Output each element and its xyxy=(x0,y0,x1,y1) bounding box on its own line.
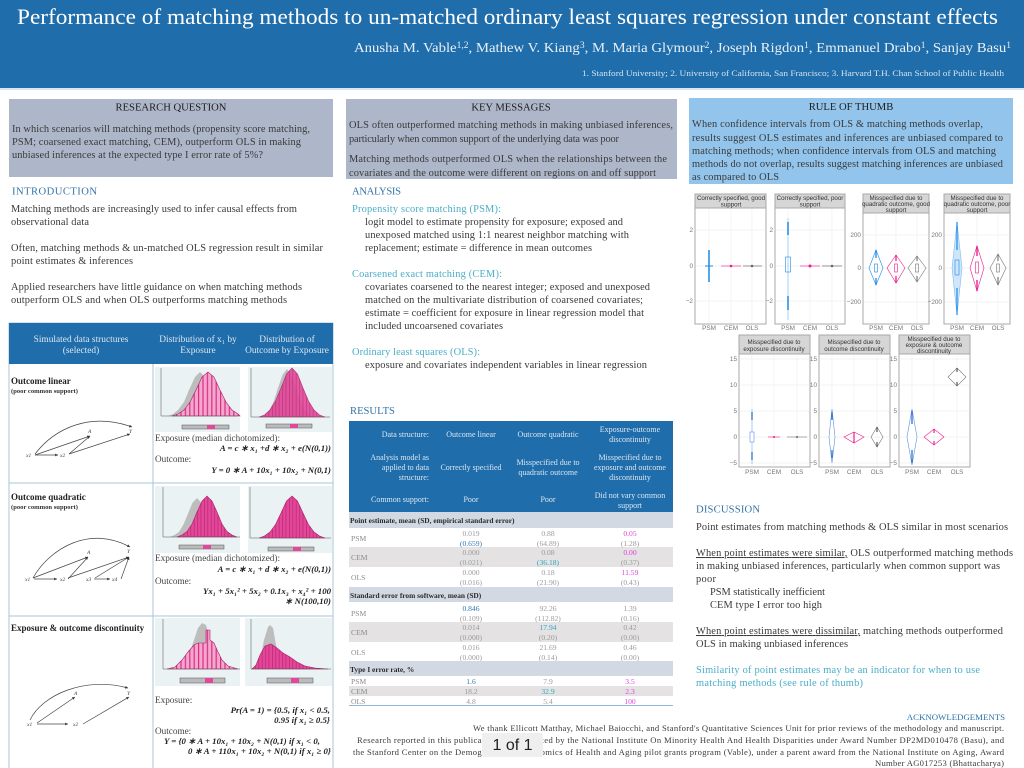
chart: correctly specified, poor support xyxy=(766,194,845,332)
results: standard error: OLS xyxy=(351,648,365,657)
results table header: applied to data xyxy=(382,463,429,472)
results: standard error: 92.26 xyxy=(539,604,557,613)
equations: outcome linear: Y = 0 ∗ A + 10x₁ + 10x₂ + N(0,1) xyxy=(211,465,331,475)
results table header: Exposure-outcome xyxy=(600,425,661,434)
authors: , Sanjay Basu xyxy=(926,41,1006,56)
results: point estimate: (0.659) xyxy=(460,539,483,548)
histogram: x1 by exposure xyxy=(155,367,240,432)
equations: outcome quadratic: Yx₁ + 5x₁² + 5x₂ + 0.1x₃ + x₄² + 100 xyxy=(203,586,332,596)
table header: Distribution of xyxy=(259,334,316,345)
chart: misspecified quadratic, poor support: CEM xyxy=(970,325,984,332)
results table header: structure: xyxy=(399,473,429,482)
panel: key messages xyxy=(346,99,677,179)
chart: misspecified quadratic, poor support xyxy=(928,194,1010,332)
equations: discontinuity: Outcome: xyxy=(155,726,191,736)
chart: misspecified quadratic, poor support: support xyxy=(967,207,988,214)
results: point estimate: 0.000 xyxy=(462,548,480,557)
results: point estimate: (0.37) xyxy=(621,558,640,567)
results: standard error: 0.846 xyxy=(462,604,480,613)
DAG: outcome quadratic: x4 xyxy=(111,576,117,583)
equations: outcome quadratic: ∗ N(100,10) xyxy=(285,596,331,606)
results: point estimate: (36.18) xyxy=(537,558,560,567)
authors: 1 xyxy=(921,40,926,50)
analysis section xyxy=(352,186,651,371)
chart: outcome discontinuity: 0 xyxy=(813,434,817,441)
DAG: outcome quadratic xyxy=(24,538,131,583)
panel: rule of thumb xyxy=(689,98,1013,184)
authors: 1,2 xyxy=(457,40,468,50)
title: Performance of matching methods to un-matched ordinary least squares regression under constant effects xyxy=(17,4,998,29)
chart: exposure and outcome discontinuity: −5 xyxy=(890,460,897,467)
results table header xyxy=(349,421,673,512)
results table header: Outcome linear xyxy=(446,430,496,439)
results: standard error: Standard error from software, mean (SD) xyxy=(350,591,482,600)
DAG: discontinuity: A xyxy=(73,691,78,697)
rule of thumb text: methods do not overlap, results suggest matching inferences are unbiased xyxy=(692,159,1004,170)
results: standard error: (112.82) xyxy=(535,614,561,623)
equations: outcome quadratic: A = c ∗ x₁ + d ∗ x₂ + e(N(0,1)) xyxy=(217,564,331,574)
equations: outcome quadratic: Exposure (median dichotomized): xyxy=(155,553,280,563)
results: standard error: 1.39 xyxy=(623,604,637,613)
chart: exposure and outcome discontinuity: Misspecified due to xyxy=(908,336,961,343)
CEM text: included uncoarsened covariates xyxy=(365,321,503,332)
results: point estimate: PSM xyxy=(351,534,366,543)
DAG: outcome linear: x2 xyxy=(59,453,65,459)
chart: outcome discontinuity: 15 xyxy=(810,356,817,363)
CEM text: matched on the multivariate distribution of coarsened covariates; xyxy=(365,295,643,306)
DAG: discontinuity: x2 xyxy=(72,722,78,728)
discussion text: When point estimates were similar, OLS outperformed matching methods xyxy=(696,548,1013,559)
authors: 2 xyxy=(705,40,709,50)
heading: discussion: DISCUSSION xyxy=(696,504,760,516)
authors: Anusha M. Vable xyxy=(354,41,451,56)
chart: correctly specified, good support xyxy=(686,194,766,332)
results: point estimate: Point estimate, mean (SD, empirical standard error) xyxy=(350,516,515,525)
row sublabel: (poor common support) xyxy=(11,388,78,395)
introduction text: Applied researchers have little guidance on when matching methods xyxy=(11,282,302,293)
chart: misspecified quadratic, poor support: quadratic outcome, poor xyxy=(944,201,1010,208)
chart: correctly specified, good support: −2 xyxy=(686,298,693,305)
introduction text: observational data xyxy=(11,217,89,228)
histogram: x1 by exposure xyxy=(155,486,240,553)
histogram: outcome by exposure xyxy=(245,618,332,686)
equations: discontinuity: Y = {0 ∗ A + 10x₁ + 10x₂ + N(0,1) if x₁ < 0, xyxy=(164,736,320,746)
key messages text: covariates and the outcome were different on regions on and off support xyxy=(349,168,656,179)
results table header: Outcome quadratic xyxy=(517,430,579,439)
chart: misspecified quadratic, good support: OLS xyxy=(911,325,923,332)
chart: exposure and outcome discontinuity: 5 xyxy=(893,408,897,415)
DAG: outcome linear: Y xyxy=(129,429,133,435)
DAG: outcome quadratic: x2 xyxy=(59,577,65,583)
results: point estimate: (64.89) xyxy=(537,539,560,548)
results: type I error rate: 4.8 xyxy=(466,697,476,706)
chart: correctly specified, poor support: CEM xyxy=(803,325,817,332)
results: standard error: 0.42 xyxy=(623,623,637,632)
results: point estimate: (0.016) xyxy=(460,578,483,587)
chart: exposure discontinuity: 15 xyxy=(730,356,737,363)
chart: outcome discontinuity: Misspecified due to xyxy=(828,339,881,346)
chart: correctly specified, good support: Correctly specified, good xyxy=(697,195,766,202)
results: type I error rate: CEM xyxy=(351,687,368,696)
introduction section xyxy=(11,186,324,306)
key messages text: Matching methods outperformed OLS when the relationships between the xyxy=(349,154,667,165)
results: standard error: 21.69 xyxy=(539,643,557,652)
chart: exposure and outcome discontinuity: OLS xyxy=(951,469,963,476)
results: type I error rate: 2.3 xyxy=(625,687,635,696)
chart: exposure and outcome discontinuity: 15 xyxy=(890,356,897,363)
row: outcome linear xyxy=(11,367,332,475)
discussion text: in making unbiased inferences, particularly when common support was xyxy=(696,561,1000,572)
introduction text: point estimates & inferences xyxy=(11,256,133,267)
acknowledgements text: We thank Ellicott Matthay, Michael Baiocchi, and Stanford's Quantitative Sciences Unit for prior reviews of the methodology and manuscript. xyxy=(473,723,1004,733)
results section xyxy=(349,406,673,706)
chart: exposure and outcome discontinuity: discontinuity xyxy=(917,348,952,355)
chart: outcome discontinuity: outcome discontinuity xyxy=(824,346,885,353)
histogram: outcome by exposure xyxy=(248,486,332,553)
chart: misspecified quadratic, good support: support xyxy=(886,207,907,214)
results: type I error rate: OLS xyxy=(351,697,365,706)
results: standard error: CEM xyxy=(351,628,368,637)
results: type I error rate: 18.2 xyxy=(464,687,478,696)
chart: correctly specified, poor support: support xyxy=(800,202,821,208)
chart: exposure discontinuity: CEM xyxy=(767,469,781,476)
chart: exposure discontinuity: 5 xyxy=(733,408,737,415)
rule of thumb text: as compared to OLS xyxy=(692,172,779,183)
chart: correctly specified, good support: 0 xyxy=(689,263,693,270)
results: point estimate: 0.88 xyxy=(541,529,555,538)
results table header: support xyxy=(618,501,643,510)
results table header: Common support: xyxy=(371,495,429,504)
results table header: Did not vary common xyxy=(595,491,665,500)
OLS heading: Ordinary least squares (OLS): xyxy=(352,347,480,358)
results: standard error: PSM xyxy=(351,609,366,618)
authors: , M. Maria Glymour xyxy=(585,41,705,56)
chart: exposure and outcome discontinuity: PSM xyxy=(905,469,919,476)
introduction text: Matching methods are increasingly used to infer causal effects from xyxy=(11,204,297,215)
chart: outcome discontinuity: 5 xyxy=(813,408,817,415)
PSM text: logit model to estimate propensity for exposure; exposed and xyxy=(365,217,624,228)
DAG: outcome quadratic: A xyxy=(86,550,91,556)
chart: misspecified quadratic, poor support: PSM xyxy=(950,325,964,332)
chart: exposure discontinuity: 10 xyxy=(730,382,737,389)
research question text: In which scenarios will matching methods (propensity score matching, xyxy=(12,124,310,135)
research question text: unbiased inferences at the expected type I error rate of 5%? xyxy=(12,150,263,161)
header banner xyxy=(0,0,1024,90)
equations: outcome linear: Exposure (median dichotomized): xyxy=(155,433,280,443)
chart: correctly specified, poor support: −2 xyxy=(766,298,773,305)
chart: misspecified quadratic, good support: 0 xyxy=(857,265,861,272)
histogram: outcome by exposure xyxy=(248,367,332,432)
discussion takeaway: matching methods (see rule of thumb) xyxy=(696,678,863,689)
table header xyxy=(9,323,333,364)
panel: research question xyxy=(9,99,333,177)
chart: exposure discontinuity: exposure discontinuity xyxy=(743,346,806,353)
rule of thumb text: matching methods; when confidence intervals from OLS and matching xyxy=(692,146,996,157)
chart: exposure discontinuity: 0 xyxy=(733,434,737,441)
results: type I error rate: PSM xyxy=(351,677,366,686)
chart: exposure discontinuity: −5 xyxy=(730,460,737,467)
DAG: discontinuity: x1 xyxy=(26,722,32,728)
DAG: outcome linear xyxy=(25,421,133,459)
DAG: outcome quadratic: x3 xyxy=(85,577,91,583)
chart: exposure and outcome discontinuity: 0 xyxy=(893,434,897,441)
table header: Distribution of x₁ by xyxy=(159,334,237,345)
results: standard error: 0.46 xyxy=(623,643,637,652)
discussion text: OLS in making unbiased inferences xyxy=(696,639,848,650)
table header: (selected) xyxy=(63,345,99,356)
results: type I error rate: 32.9 xyxy=(541,687,555,696)
chart: correctly specified, good support: OLS xyxy=(746,325,758,332)
PSM text: unexposed matched using 1:1 nearest neighbor matching with xyxy=(365,230,630,241)
affiliations: 1. Stanford University; 2. University of California, San Francisco; 3. Harvard T.H. Chan School of Public Health xyxy=(582,68,1005,78)
CEM text: covariates coarsened to the nearest integer; exposed and unexposed xyxy=(365,282,651,293)
chart: correctly specified, good support: PSM xyxy=(702,325,716,332)
results: type I error rate: 5.4 xyxy=(543,697,553,706)
page counter overlay xyxy=(482,733,543,757)
chart: misspecified quadratic, good support: −200 xyxy=(847,299,861,306)
heading: introduction: INTRODUCTION xyxy=(12,186,97,198)
chart: correctly specified, good support: CEM xyxy=(724,325,738,332)
results: standard error: (0.20) xyxy=(539,633,558,642)
discussion text: Point estimates from matching methods & OLS similar in most scenarios xyxy=(696,522,1008,533)
authors: 1 xyxy=(1006,40,1011,50)
discussion text: When point estimates were dissimilar, matching methods outperformed xyxy=(696,626,1003,637)
results: standard error: (0.109) xyxy=(460,614,483,623)
results: point estimate: (0.43) xyxy=(621,578,640,587)
heading: rule of thumb: RULE OF THUMB xyxy=(809,102,893,113)
chart: correctly specified, poor support: Correctly specified, poor xyxy=(777,195,843,202)
equations: outcome quadratic: Outcome: xyxy=(155,576,191,586)
equations: discontinuity: 0.95 if x₁ ≥ 0.5} xyxy=(274,715,330,725)
results: point estimate: 11.59 xyxy=(622,568,639,577)
equations: discontinuity xyxy=(155,695,331,756)
table header: Simulated data structures xyxy=(34,335,129,345)
discussion text: PSM statistically inefficient xyxy=(710,587,825,598)
chart: outcome discontinuity: CEM xyxy=(847,469,861,476)
discussion takeaway: Similarity of point estimates may be an indicator for when to use xyxy=(696,665,980,676)
acknowledgements text: Number AG017253 (Bhattacharya) xyxy=(875,758,1004,768)
acknowledgements text: the Stanford Center on the Demography and Economics of Health and Aging pilot grants program (Vable), under a parent award from the National Institute on Aging, Award xyxy=(353,747,1005,757)
OLS text: exposure and covariates independent variables in linear regression xyxy=(365,360,648,371)
chart: misspecified quadratic, good support xyxy=(847,194,931,332)
results table header: Poor xyxy=(463,495,479,504)
chart: outcome discontinuity: PSM xyxy=(825,469,839,476)
chart: correctly specified, poor support: OLS xyxy=(826,325,838,332)
DAG: discontinuity: Y xyxy=(127,691,131,697)
results: point estimate: OLS xyxy=(351,573,365,582)
chart: exposure and outcome discontinuity xyxy=(890,335,970,476)
CEM heading: Coarsened exact matching (CEM): xyxy=(352,269,502,280)
heading: results: RESULTS xyxy=(350,406,395,417)
histogram: x1 by exposure xyxy=(155,618,240,686)
authors: , Joseph Rigdon xyxy=(709,41,804,56)
row: outcome quadratic xyxy=(11,486,332,606)
equations: discontinuity: 0 ∗ A + 110x₁ + 10x₂ + N(0,1) if x₁ ≥ 0} xyxy=(188,746,331,756)
chart: misspecified quadratic, good support: PSM xyxy=(869,325,883,332)
results: standard error: (0.00) xyxy=(621,633,640,642)
DAG: discontinuity xyxy=(26,684,131,728)
results: standard error: (0.000) xyxy=(460,633,483,642)
introduction text: outperform OLS and when OLS outperforms matching methods xyxy=(11,295,287,306)
results: point estimate: 0.08 xyxy=(541,548,555,557)
chart: misspecified quadratic, good support: quadratic outcome, good xyxy=(862,201,931,208)
table: simulated data structures xyxy=(9,323,333,768)
research question text: PSM; coarsened exact matching, CEM), outperform OLS in making xyxy=(12,137,301,148)
results table header: Analysis model as xyxy=(370,453,429,462)
results: type I error rate: Type I error rate, % xyxy=(350,665,414,674)
chart: misspecified quadratic, poor support: −200 xyxy=(928,299,942,306)
DAG: outcome quadratic: x1 xyxy=(24,577,30,583)
results: type I error rate: 3.5 xyxy=(625,677,635,686)
chart: outcome discontinuity: OLS xyxy=(871,469,883,476)
key messages text: particularly when common support of the underlying data was poor xyxy=(349,134,620,145)
results: point estimate: 0.18 xyxy=(541,568,555,577)
chart: correctly specified, good support: 2 xyxy=(689,227,693,234)
chart: misspecified quadratic, good support: CEM xyxy=(889,325,903,332)
chart: outcome discontinuity xyxy=(810,335,890,476)
key messages text: OLS often outperformed matching methods in making unbiased inferences, xyxy=(349,120,673,131)
results table header: discontinuity xyxy=(609,473,651,482)
results: point estimate: 0.019 xyxy=(462,529,480,538)
authors: , Emmanuel Drabo xyxy=(809,41,921,56)
authors: 1 xyxy=(804,40,809,50)
chart: outcome discontinuity: 10 xyxy=(810,382,817,389)
chart: exposure discontinuity: OLS xyxy=(791,469,803,476)
results: standard error: 17.94 xyxy=(539,623,557,632)
rule of thumb text: When confidence intervals from OLS & matching methods overlap, xyxy=(692,119,983,130)
introduction text: Often, matching methods & un-matched OLS regression result in similar xyxy=(11,243,324,254)
table header: Exposure xyxy=(180,346,216,356)
results: point estimate: (21.90) xyxy=(537,578,560,587)
DAG: outcome linear: A xyxy=(87,429,92,435)
equations: outcome quadratic xyxy=(155,553,332,606)
results table header: quadratic outcome xyxy=(518,468,578,477)
authors: 3 xyxy=(580,40,585,50)
results table header: Misspecified due to xyxy=(598,453,662,462)
equations: outcome linear: Outcome: xyxy=(155,454,191,464)
discussion text: CEM type I error too high xyxy=(710,600,823,611)
row label: Exposure & outcome discontinuity xyxy=(11,623,145,633)
chart: misspecified quadratic, poor support: Misspecified due to xyxy=(951,195,1004,202)
results: type I error rate: 1.6 xyxy=(466,677,476,686)
authors: , Mathew V. Kiang xyxy=(468,41,580,56)
chart: misspecified quadratic, poor support: 200 xyxy=(931,232,942,239)
page counter overlay: 1 of 1 xyxy=(492,737,533,754)
results: standard error: (0.00) xyxy=(621,653,640,662)
results: point estimate: 0.05 xyxy=(623,529,637,538)
heading: analysis: ANALYSIS xyxy=(352,186,401,198)
heading: key messages: KEY MESSAGES xyxy=(471,102,551,114)
rule of thumb text: results suggest OLS estimates and inferences are unbiased compared to xyxy=(692,133,1003,144)
chart: exposure and outcome discontinuity: 10 xyxy=(890,382,897,389)
acknowledgements text: Research reported in this publication was supported by the National Institute On Minority Health And Health Disparities under Award Number DP2MD010478 (Basu), and xyxy=(357,735,1005,745)
results: point estimate xyxy=(349,512,673,587)
chart: misspecified quadratic, poor support: 0 xyxy=(938,265,942,272)
results: standard error: (0.14) xyxy=(539,653,558,662)
chart: misspecified quadratic, poor support: OLS xyxy=(992,325,1004,332)
chart: misspecified quadratic, good support: 200 xyxy=(850,232,861,239)
results: point estimate: (0.021) xyxy=(460,558,483,567)
discussion text: poor xyxy=(696,574,717,585)
chart: exposure discontinuity xyxy=(730,335,810,476)
heading: acknowledgements: ACKNOWLEDGEMENTS xyxy=(907,712,1005,722)
equations: outcome linear: A = c ∗ x₁ +d ∗ x₂ + e(N(0,1)) xyxy=(219,443,331,453)
chart: exposure and outcome discontinuity: CEM xyxy=(927,469,941,476)
chart: correctly specified, poor support: PSM xyxy=(781,325,795,332)
chart: misspecified quadratic, good support: Misspecified due to xyxy=(870,195,923,202)
results table header: Poor xyxy=(540,495,556,504)
chart: exposure discontinuity: Misspecified due to xyxy=(748,339,801,346)
acknowledgements xyxy=(353,712,1005,768)
results table header: exposure and outcome xyxy=(594,463,666,472)
results table header: Data structure: xyxy=(382,430,429,439)
PSM text: replacement; estimate = difference in mean outcomes xyxy=(365,243,592,254)
chart: exposure discontinuity: PSM xyxy=(745,469,759,476)
discussion section xyxy=(696,504,1013,689)
chart: outcome discontinuity: −5 xyxy=(810,460,817,467)
results table header: Misspecified due to xyxy=(516,458,580,467)
results: standard error xyxy=(349,587,673,662)
results: point estimate: 0.00 xyxy=(623,548,637,557)
results: standard error: 0.016 xyxy=(462,643,480,652)
chart: correctly specified, poor support: 0 xyxy=(769,263,773,270)
results: point estimate: 0.000 xyxy=(462,568,480,577)
DAG: outcome quadratic: Y xyxy=(127,549,131,555)
results: standard error: (0.000) xyxy=(460,653,483,662)
results table header: discontinuity xyxy=(609,435,651,444)
row: exposure and outcome discontinuity xyxy=(11,618,332,756)
results: standard error: 0.014 xyxy=(462,623,480,632)
CEM text: estimate = coefficient for exposure in linear regression model that xyxy=(365,308,644,319)
table header: Outcome by Exposure xyxy=(245,346,329,356)
chart: exposure and outcome discontinuity: exposure & outcome xyxy=(906,342,963,349)
row label: Outcome linear xyxy=(11,376,71,386)
results: standard error: (0.16) xyxy=(621,614,640,623)
results: type I error rate xyxy=(349,661,673,706)
chart: correctly specified, good support: support xyxy=(721,202,742,208)
results: type I error rate: 7.9 xyxy=(543,677,553,686)
heading: research question: RESEARCH QUESTION xyxy=(116,102,227,114)
equations: discontinuity: Exposure: xyxy=(155,695,192,705)
row sublabel: (poor common support) xyxy=(11,504,78,511)
results table header: Correctly specified xyxy=(440,463,502,472)
row label: Outcome quadratic xyxy=(11,492,86,502)
results: point estimate: (1.28) xyxy=(621,539,640,548)
DAG: outcome linear: x1 xyxy=(25,453,31,459)
results: point estimate: CEM xyxy=(351,553,368,562)
results: type I error rate: 100 xyxy=(624,697,636,706)
chart: correctly specified, poor support: 2 xyxy=(769,227,773,234)
equations: outcome linear xyxy=(155,433,331,475)
equations: discontinuity: Pr(A = 1) = {0.5, if x₁ < 0.5, xyxy=(231,705,330,715)
PSM heading: Propensity score matching (PSM): xyxy=(352,204,501,215)
